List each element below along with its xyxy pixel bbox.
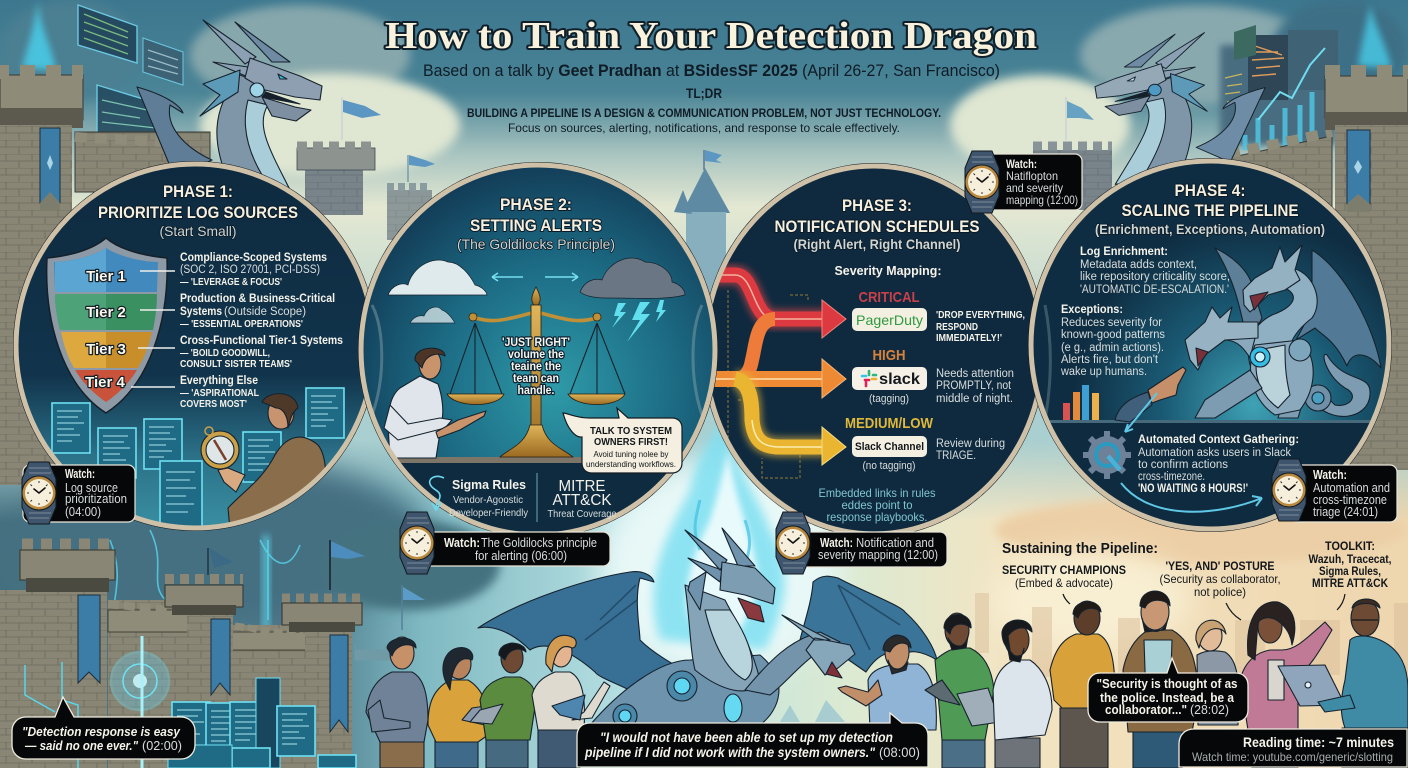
watch callout: automation: Watch: (1313, 468, 1347, 482)
critical row: 'DROP EVERYTHING, (936, 310, 1025, 321)
tier labels: Tier 3 (86, 341, 126, 358)
phase 2 heading: PHASE 2: (500, 195, 572, 214)
log enrichment: Log Enrichment: (1080, 244, 1168, 258)
quote: system owners: (08:00) (879, 745, 920, 760)
phase 2 heading: (The Goldilocks Principle) (457, 236, 615, 252)
just right text: 'JUST RIGHT' (502, 335, 570, 349)
toolkit: TOOLKIT: (1325, 539, 1375, 553)
medium low row: MEDIUM/LOW (845, 415, 934, 432)
central flames (653, 420, 785, 650)
MITRE ATT&CK (537, 473, 617, 522)
high row: PROMPTLY, not (936, 380, 1012, 392)
TL;DR text: Focus on sources, alerting, notifications, and response to scale effectively. (508, 121, 900, 135)
automated context gathering (1138, 432, 1299, 495)
central dragon (478, 528, 937, 728)
right group of people (838, 591, 1408, 768)
high row: HIGH (872, 347, 906, 364)
top-left dragon (137, 20, 322, 190)
just right text (502, 335, 570, 397)
medium low row: Review during (936, 438, 1005, 450)
phase 2 heading (457, 195, 615, 252)
watch callout: notification: severity mapping (12:00) (818, 548, 938, 562)
robotic dragon (1185, 245, 1381, 418)
security champions: SECURITY CHAMPIONS (1002, 563, 1126, 577)
tier labels (85, 268, 126, 391)
quote: system owners: "I would not have been able to set up my detection (600, 729, 893, 745)
left group of people (366, 635, 610, 768)
person 5 (838, 635, 936, 730)
sustaining the pipeline heading: Sustaining the Pipeline: (1002, 540, 1158, 557)
automated context gathering: to confirm actions (1138, 459, 1228, 471)
watch callout: top notification: Watch: (1006, 157, 1037, 171)
neck second head (745, 632, 840, 695)
tier descriptions: — 'ESSENTIAL OPERATIONS' (180, 319, 303, 330)
MITRE ATT&CK: MITRE (558, 478, 606, 495)
phase 2 panel (350, 162, 730, 543)
head (685, 528, 755, 610)
body (590, 655, 779, 725)
yes and posture: (Security as collaborator, (1160, 572, 1280, 586)
watch callout: notification: Notification and (856, 536, 934, 550)
tier descriptions: — 'ASPIRATIONAL (180, 388, 259, 399)
quote: detection response: — said no one ever." (24, 739, 139, 753)
top-right castle with charts (1220, 4, 1408, 470)
reading time box: Reading time: ~7 minutes (1243, 734, 1394, 750)
yes and posture (1160, 559, 1280, 620)
exceptions: Exceptions: (1061, 302, 1123, 316)
tier labels: Tier 1 (86, 268, 126, 285)
watch callout: goldilocks: The Goldilocks principle (481, 536, 597, 550)
phase 2 heading: SETTING ALERTS (470, 216, 602, 235)
quote: detection response (12, 697, 195, 759)
tier descriptions: — 'LEVERAGE & FOCUS' (180, 277, 282, 288)
speech bubble: talk to owners: understanding workflows. (586, 459, 676, 469)
exceptions: wake up humans. (1060, 366, 1147, 378)
speech bubble: talk to owners: Avoid tuning nolee by (594, 449, 669, 459)
sigma rules: Vendor-Agoostic (453, 495, 523, 506)
TL;DR text: BUILDING A PIPELINE IS A DESIGN & COMMUNICATION PROBLEM, NOT JUST TECHNOLOGY. (467, 108, 941, 120)
critical row: CRITICAL (858, 289, 920, 306)
storm cloud (580, 258, 685, 298)
phase 1 heading (98, 182, 298, 239)
critical row (852, 289, 1025, 344)
watch callout: goldilocks (400, 512, 610, 574)
quote: system owners (577, 713, 928, 767)
watch callout: top notification (965, 151, 1082, 213)
tier descriptions: (Outside Scope) (224, 306, 306, 318)
watch callout: automation: cross-timezone (1313, 493, 1387, 507)
exceptions: (e g., admin actions). (1061, 342, 1164, 354)
watch callout: automation (1272, 459, 1397, 522)
tier descriptions: Systems (180, 306, 222, 318)
TL;DR heading: TL;DR (686, 85, 722, 101)
just right text: volume the (508, 347, 564, 361)
medium low row: TRIAGE. (936, 450, 976, 462)
just right text: handle. (518, 383, 554, 397)
faint arc (1045, 305, 1050, 420)
tier descriptions: Everything Else (180, 375, 258, 387)
phase 3 heading: (Right Alert, Right Channel) (794, 236, 960, 252)
subtitle text: Based on a talk by Geet Pradhan at BSidesSF 2025 (April 26-27, San Francisco) (423, 61, 1000, 80)
quote: detection response: "Detection response is easy (22, 725, 181, 739)
log enrichment (1080, 244, 1230, 296)
MITRE ATT&CK: Threat Coverage (548, 509, 617, 520)
speech bubble: talk to owners: OWNERS FIRST! (594, 436, 668, 448)
bottom-left castle (0, 530, 425, 768)
embedded links note (818, 486, 936, 524)
medium low row (845, 415, 1005, 472)
medium low row: Slack Channel (855, 441, 924, 453)
log enrichment: Metadata adds context, (1080, 259, 1197, 271)
person 3 (470, 643, 536, 768)
flow arrows (1121, 393, 1262, 512)
high row: middle of night. (936, 393, 1013, 405)
reading time box: Watch time: youtube.com/generic/slotting (1192, 750, 1393, 764)
high row: Needs attention (936, 368, 1014, 380)
just right text: teaine the (511, 359, 561, 373)
reading time box (1179, 729, 1407, 767)
top-right dragon (1095, 33, 1265, 184)
person 6 (925, 613, 1000, 768)
icon: slack logo (862, 371, 876, 386)
watch callout: automation: triage (24:01) (1313, 505, 1378, 519)
watch callout: automation: Automation and (1313, 481, 1390, 495)
quote: police: "Security is thought of as (1096, 676, 1238, 691)
white clouds (388, 260, 487, 323)
tier descriptions: COVERS MOST' (180, 399, 247, 410)
watch callout: goldilocks: Watch: (444, 536, 480, 550)
tier shield (47, 238, 175, 413)
severity mapping heading: Severity Mapping: (834, 263, 942, 278)
sigma rules: Developer-Friendly (449, 508, 528, 519)
circuit traces (728, 290, 810, 478)
embedded links note: eddes point to (842, 498, 913, 512)
sigma rules (430, 476, 528, 519)
quote: detection response: (02:00) (142, 739, 182, 753)
high row: (tagging) (869, 393, 909, 405)
exceptions: Alerts fire, but don't (1061, 354, 1159, 366)
critical row: RESPOND (936, 322, 978, 333)
watch callout: top notification: and severity (1006, 181, 1063, 195)
watch callout: notification: Watch: (820, 536, 853, 550)
automated context gathering: Automated Context Gathering: (1138, 432, 1299, 446)
speech bubble: talk to owners: TALK TO SYSTEM (590, 425, 672, 437)
quote: police: the police. Instead, be a (1100, 690, 1235, 705)
critical row: IMMEDIATELY!' (936, 333, 1002, 344)
MITRE ATT&CK: ATT&CK (552, 492, 612, 509)
phase 1 heading: (Start Small) (160, 223, 236, 239)
golden scale (447, 287, 625, 457)
person 9 (1123, 591, 1198, 768)
watch callout: log source (22, 462, 135, 524)
phase 3 heading (774, 196, 980, 252)
tier labels: Tier 2 (86, 304, 126, 321)
person 11 (1240, 602, 1345, 768)
analyst with compass (201, 394, 326, 530)
background small towers (297, 97, 1112, 302)
phase 4 heading (1095, 181, 1325, 237)
hand pointing (1115, 367, 1186, 422)
toolkit (1308, 539, 1392, 610)
high row (852, 347, 1014, 405)
person 1 (366, 637, 428, 768)
watch callout: log source: Watch: (65, 467, 95, 481)
exceptions: Reduces severity for (1061, 317, 1162, 329)
phase 3 panel (700, 163, 1046, 537)
embedded links note: Embedded links in rules (818, 486, 936, 500)
tier labels: Tier 4 (85, 374, 126, 391)
tier descriptions: Production & Business-Critical (180, 293, 335, 305)
distant skyline (975, 593, 1408, 678)
right wing (800, 576, 937, 672)
phase 1 heading: PHASE 1: (163, 182, 233, 201)
phase 3 heading: NOTIFICATION SCHEDULES (774, 217, 980, 236)
quote: system owners: pipeline if I did not work with the system owners." (584, 744, 875, 760)
phase 4 heading: SCALING THE PIPELINE (1122, 201, 1298, 220)
person 7 (993, 620, 1052, 768)
yes and posture: 'YES, AND' POSTURE (1166, 559, 1274, 573)
toolkit: MITRE ATT&CK (1312, 576, 1388, 590)
left wing (478, 572, 692, 705)
critical row: PagerDuty (856, 312, 923, 328)
medium low row: (no tagging) (862, 460, 916, 472)
icon: gear with magnifier (1083, 431, 1131, 479)
volume arrows (492, 273, 578, 281)
lightning (612, 300, 666, 342)
quote: police (1088, 658, 1248, 722)
just right text: team can (513, 371, 559, 385)
tier descriptions: Cross-Functional Tier-1 Systems (180, 335, 343, 347)
embedded links note: response playbooks. (826, 510, 928, 524)
phase 4 heading: PHASE 4: (1174, 181, 1246, 200)
speech bubble: talk to owners (563, 408, 682, 473)
title: How to Train Your Detection Dragon (385, 15, 1037, 57)
watch callout: log source: Log source (65, 481, 118, 495)
watch callout: notification (776, 512, 947, 574)
person 8 (1050, 601, 1115, 768)
severity arrows (700, 275, 826, 447)
bar chart (1063, 385, 1099, 420)
person 12 (1318, 599, 1408, 768)
phase 1 panel (13, 161, 377, 531)
quote: police: collaborator..." (1105, 702, 1187, 717)
log enrichment: like repository criticality score, (1080, 271, 1230, 283)
exceptions (1060, 302, 1165, 378)
tier descriptions: Compliance-Scoped Systems (180, 252, 327, 264)
phase 1 heading: PRIORITIZE LOG SOURCES (98, 203, 298, 222)
log enrichment: 'AUTOMATIC DE-ESCALATION.' (1080, 284, 1229, 296)
tier descriptions: (SOC 2, ISO 27001, PCI-DSS) (180, 264, 320, 276)
automated context gathering: Automation asks users in Slack (1138, 447, 1291, 459)
analyst at the scale (384, 348, 486, 458)
quote: police: (28:02) (1190, 702, 1229, 717)
phase 4 heading: (Enrichment, Exceptions, Automation) (1095, 221, 1325, 237)
tier descriptions (180, 252, 343, 410)
tier descriptions: — 'BOILD GOODWILL, (180, 348, 270, 359)
high row: slack (879, 371, 920, 388)
exceptions: known-good patterns (1061, 329, 1165, 341)
toolkit: Wazuh, Tracecat, (1308, 552, 1392, 566)
person 2 (428, 648, 492, 768)
log panels (52, 388, 344, 531)
toolkit: Sigma Rules, (1319, 564, 1381, 578)
watch callout: log source: (04:00) (65, 505, 101, 519)
watch callout: top notification: mapping (12:00) (1006, 193, 1078, 207)
watch callout: goldilocks: for alerting (06:00) (475, 549, 567, 563)
TL;DR text (467, 108, 941, 135)
watch callout: top notification: Natiflopton (1006, 169, 1058, 183)
top-left castle with data panels (0, 0, 210, 485)
person 10 (1196, 620, 1239, 725)
security champions: (Embed & advocate) (1015, 576, 1113, 590)
phase 3 heading: PHASE 3: (842, 196, 912, 215)
faint arc (372, 305, 702, 415)
automated context gathering: cross-timezone. (1138, 471, 1205, 483)
security champions (1002, 563, 1126, 604)
sigma rules: Sigma Rules (452, 477, 526, 492)
tier descriptions: CONSULT SISTER TEAMS' (180, 359, 292, 370)
phase 4 panel (1028, 158, 1392, 532)
watch callout: log source: prioritization (65, 492, 127, 506)
person 4 (532, 635, 610, 768)
yes and posture: not police) (1194, 585, 1246, 599)
automated context gathering: 'NO WAITING 8 HOURS!' (1138, 483, 1248, 495)
